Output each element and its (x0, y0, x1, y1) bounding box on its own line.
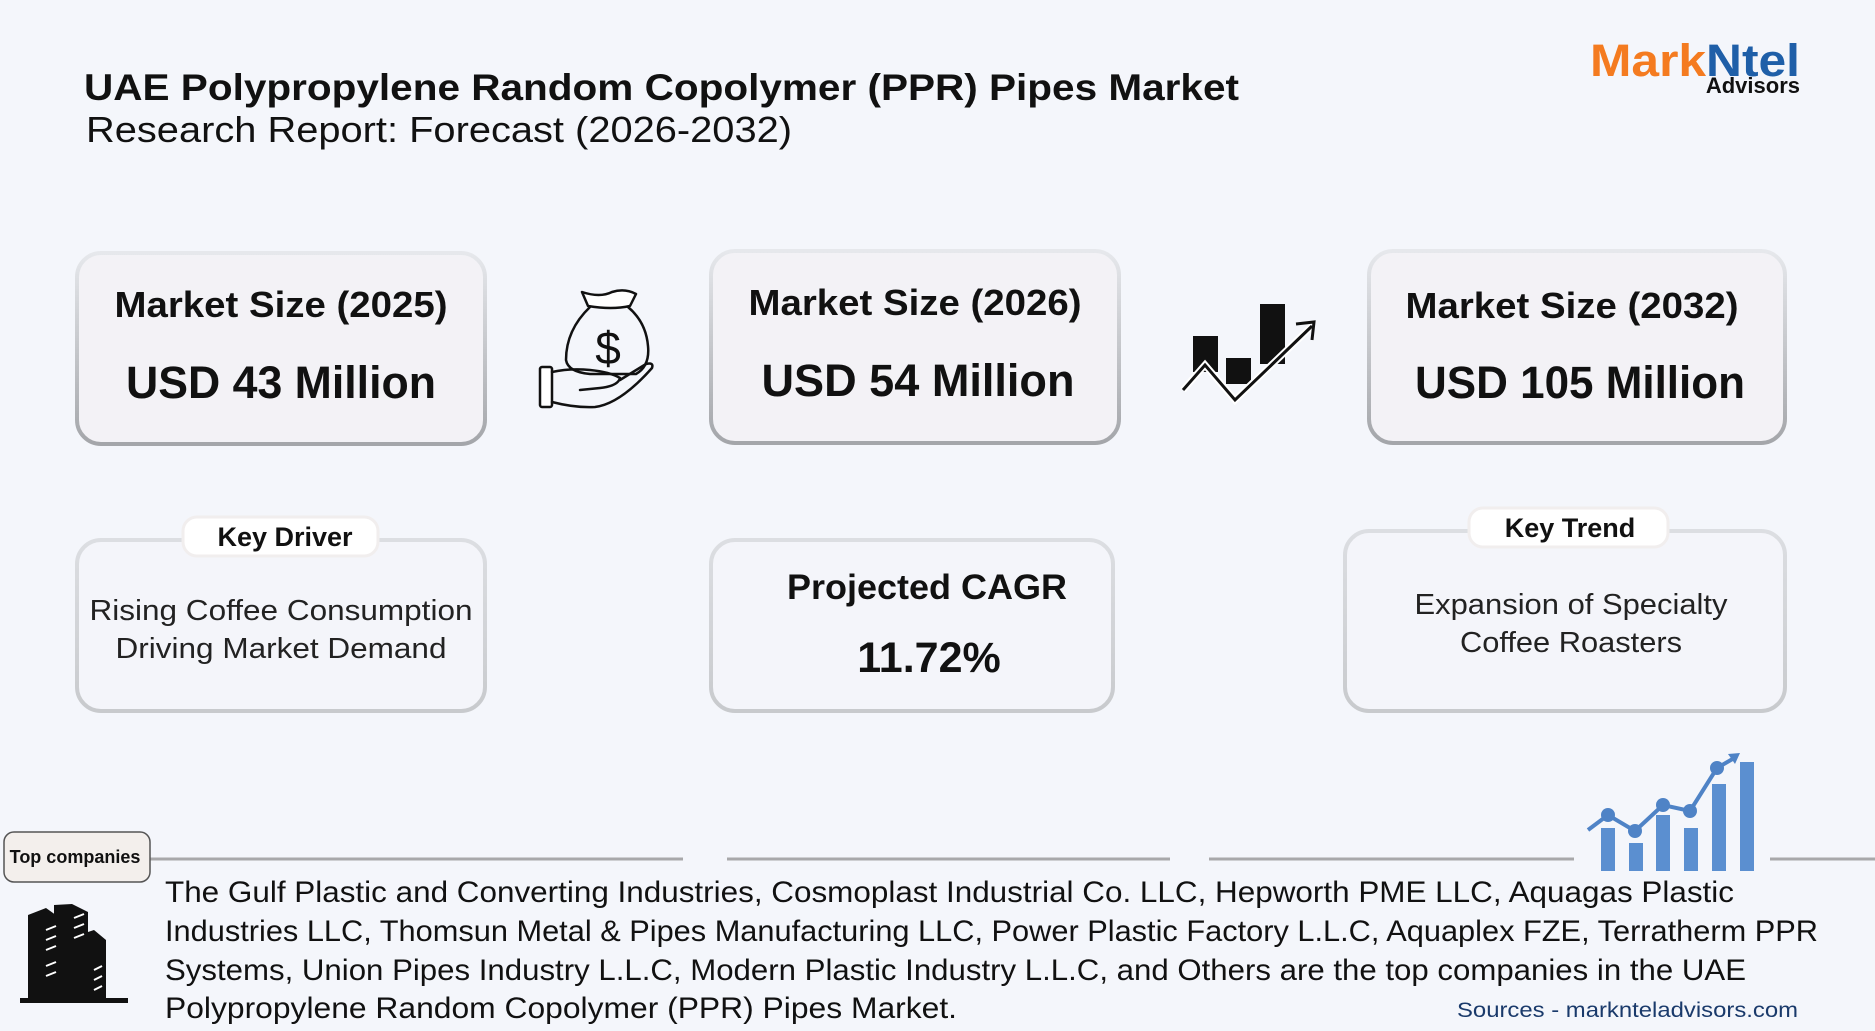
icon: blue growth bar chart (1588, 753, 1754, 871)
text block: top companies list: The Gulf Plastic and Converting Industries, Cosmoplast Industrial Co. LLC, Hepworth PME LLC, Aquagas Plastic (165, 876, 1734, 909)
icon: growth chart with arrow (1183, 304, 1314, 400)
panel: key driver (77, 517, 485, 711)
panel: key driver: Driving Market Demand (116, 633, 446, 665)
icon: money bag in hand: $ (595, 322, 621, 374)
text block: top companies list: Systems, Union Pipes Industry L.L.C, Modern Plastic Industry L.L.C, and Others are the top companies in the UAE (165, 954, 1746, 987)
panel: key trend: Expansion of Specialty (1414, 589, 1728, 621)
logo: Advisors (1706, 73, 1800, 98)
label pill: key trend (1469, 508, 1668, 547)
panel: market size 2032: Market Size (2032) (1406, 285, 1738, 326)
title (84, 67, 1239, 150)
panel: key trend (1345, 508, 1785, 711)
logo: MarkNtel (1590, 35, 1800, 86)
text block: top companies list: Industries LLC, Thomsun Metal & Pipes Manufacturing LLC, Power Plastic Factory L.L.C, Aquaplex FZE, Terratherm PPR (165, 915, 1818, 948)
text block: top companies list (165, 876, 1818, 1025)
icon: buildings (20, 904, 128, 1003)
panel: market size 2025: Market Size (2025) (114, 284, 448, 325)
panel: market size 2032 (1369, 251, 1785, 443)
panel: key trend: Coffee Roasters (1460, 627, 1682, 659)
panel: market size 2025 (77, 253, 485, 444)
panel: market size 2026 (711, 251, 1119, 443)
panel: key driver: Rising Coffee Consumption (90, 595, 472, 627)
sources: Sources - marknteladvisors.com (1457, 999, 1798, 1022)
panel: market size 2026: USD 54 Million (762, 355, 1074, 406)
panel: market size 2025: USD 43 Million (126, 357, 436, 408)
label: top companies: Top companies (10, 847, 140, 867)
panel: projected CAGR (711, 540, 1113, 711)
text block: top companies list: Polypropylene Random Copolymer (PPR) Pipes Market. (165, 992, 957, 1025)
panel: projected CAGR: Projected CAGR (787, 568, 1067, 607)
divider lines (150, 858, 1875, 860)
label: top companies (4, 832, 150, 882)
label pill: key trend: Key Trend (1505, 513, 1635, 543)
panel: projected CAGR: 11.72% (857, 634, 1001, 682)
subtitle: Research Report: Forecast (2026-2032) (86, 109, 792, 150)
label pill: key driver: Key Driver (217, 522, 353, 552)
title: UAE Polypropylene Random Copolymer (PPR) Pipes Market (84, 67, 1239, 108)
label pill: key driver (183, 517, 378, 556)
icon: money bag in hand (540, 290, 652, 407)
panel: market size 2032: USD 105 Million (1415, 357, 1745, 408)
panel: market size 2026: Market Size (2026) (748, 282, 1082, 323)
